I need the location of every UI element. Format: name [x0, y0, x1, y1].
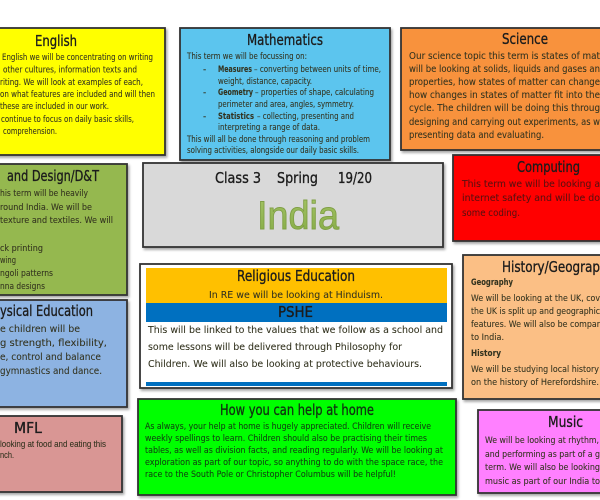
text block: Mathematics body: – collecting, presenting and: [257, 112, 354, 122]
text block: Science body: presenting data and evaluating.: [409, 130, 544, 141]
text block: History: History: [471, 349, 501, 359]
text block: MFL body: [0, 439, 106, 460]
panel: History/Geography: [463, 255, 600, 399]
text block: MFL body: looking at food and eating this: [0, 439, 106, 449]
panel: Mathematics: [180, 28, 390, 160]
text block: English body: on what features are included and will then: [0, 90, 155, 100]
panel: Religious Education and PSHE: [140, 264, 452, 388]
text block: Physical Education body: gymnastics and dance.: [0, 366, 102, 377]
heading: Science: Science: [502, 30, 548, 48]
text block: help at home body: race to the South Pole or Christopher Columbus will be helpful!: [145, 470, 396, 480]
text block: PSHE body: This will be linked to the values that we follow as a school and: [147, 325, 443, 336]
text block: Art body: round India. We will be: [0, 203, 92, 213]
text block: help at home body: As always, your help at home is hugely appreciated. Children will receive: [145, 422, 431, 432]
text block: Physical Education body: e, control and balance: [0, 352, 101, 363]
heading: class and term: Class 3: [215, 169, 261, 187]
heading: Physical Education: ysical Education: [0, 302, 93, 320]
panel: Class title: [143, 163, 443, 247]
text block: Geography: Geography: [471, 278, 513, 288]
text block: Science body: [409, 51, 600, 141]
title: India: India: [257, 194, 340, 238]
text block: Art body: wing: [0, 256, 16, 266]
text block: PSHE body: Children. We will also be looking at protective behaviours.: [148, 359, 422, 370]
text block: English body: these are included in our work.: [0, 102, 109, 112]
heading: Art and Design/DT: and Design/D&T: [7, 167, 100, 185]
panel: MFL: [0, 416, 122, 492]
text block: Mathematics body: This term we will be focussing on:: [186, 52, 307, 62]
text block: Mathematics body: – properties of shape, calculating: [255, 88, 374, 98]
text block: English body: [0, 53, 155, 137]
text block: Computing body: some coding.: [462, 208, 520, 219]
heading: class and term: 19/20: [338, 169, 372, 187]
text block: PSHE body: some lessons will be delivered through Philosophy for: [148, 342, 403, 353]
text block: Physical Education body: [0, 324, 107, 377]
text block: Mathematics body: interpreting a range of data.: [218, 123, 320, 133]
text block: Art body: ck printing: [0, 244, 43, 254]
heading: MFL: MFL: [14, 419, 43, 437]
text block: Mathematics body: This will all be done through reasoning and problem: [186, 135, 370, 145]
text block: Mathematics body: perimeter and area, angles, symmetry.: [218, 100, 354, 110]
text block: Mathematics body: Measures: [218, 65, 252, 75]
text block: Art body: nna designs: [0, 282, 45, 292]
text block: Art body: ngoli patterns: [0, 269, 53, 279]
panel: PSHE band: [146, 303, 447, 322]
heading: How you can help at home: How you can help at home: [220, 401, 374, 419]
text block: Mathematics body: solving activities, alongside our daily basic skills.: [187, 146, 359, 156]
text block: Physical Education body: e children will be: [0, 324, 80, 335]
text block: Mathematics body: Geometry: [218, 88, 253, 98]
panel: Music: [478, 410, 600, 493]
text block: Mathematics body: [186, 52, 381, 156]
text block: Art body: his term will be heavily: [0, 189, 89, 199]
panel: English: [0, 28, 165, 155]
text block: Mathematics body: -: [203, 112, 206, 122]
text block: help at home body: weekly spellings to learn. Children should also be practising their times: [145, 434, 427, 444]
heading: English: English: [35, 32, 77, 50]
text block: English body: riting. We will look at examples of each,: [0, 78, 143, 88]
panel: Computing: [453, 155, 600, 241]
text block: Mathematics body: -: [203, 88, 206, 98]
text block: help at home body: tables, as well as division facts, and reading regularly. We will be looking at: [145, 446, 443, 456]
text block: Art body: texture and textiles. We will: [0, 216, 113, 226]
text block: help at home body: [145, 422, 443, 480]
panel: Religious Education band: [146, 267, 447, 303]
panel: Physical Education: [0, 300, 127, 407]
heading: Computing: Computing: [517, 158, 580, 176]
panel: Art and Design/DT: [0, 164, 127, 295]
text block: Mathematics body: Statistics: [218, 112, 254, 122]
text block: Art body: [0, 189, 113, 292]
text block: Computing body: [461, 179, 600, 219]
text block: English body: comprehension.: [3, 127, 57, 137]
panel: How you can help at home: [138, 399, 456, 495]
text block: Mathematics body: – converting between units of time,: [254, 65, 381, 75]
text block: PSHE body: [147, 325, 443, 370]
text block: History: [471, 349, 600, 388]
text block: English body: English we will be concentrating on writing: [2, 53, 153, 63]
panel: Science: [401, 28, 600, 150]
heading: class and term: Spring: [277, 169, 318, 187]
text block: Mathematics body: -: [203, 65, 206, 75]
text block: Music body: [485, 436, 600, 487]
text block: English body: continue to focus on daily basic skills,: [1, 115, 134, 125]
heading: Religious Education: Religious Education: [237, 267, 355, 285]
text block: Geography: [471, 278, 600, 343]
text block: English body: other cultures, information texts and: [3, 66, 137, 76]
text block: Geography: to India.: [471, 333, 504, 343]
text block: MFL body: nch.: [0, 450, 14, 460]
heading: class and term: [215, 169, 372, 187]
heading: PSHE: PSHE: [278, 303, 313, 321]
heading: Music: Music: [548, 413, 583, 431]
text block: Physical Education body: g strength, flexibility,: [0, 338, 107, 349]
heading: Mathematics: Mathematics: [247, 31, 323, 49]
text block: help at home body: exploration as part of our topic, so anything to do with the space race, the: [145, 458, 443, 468]
text: Religious Education body: In RE we will be looking at Hinduism.: [209, 290, 383, 301]
text block: Mathematics body: weight, distance, capacity.: [218, 77, 312, 87]
